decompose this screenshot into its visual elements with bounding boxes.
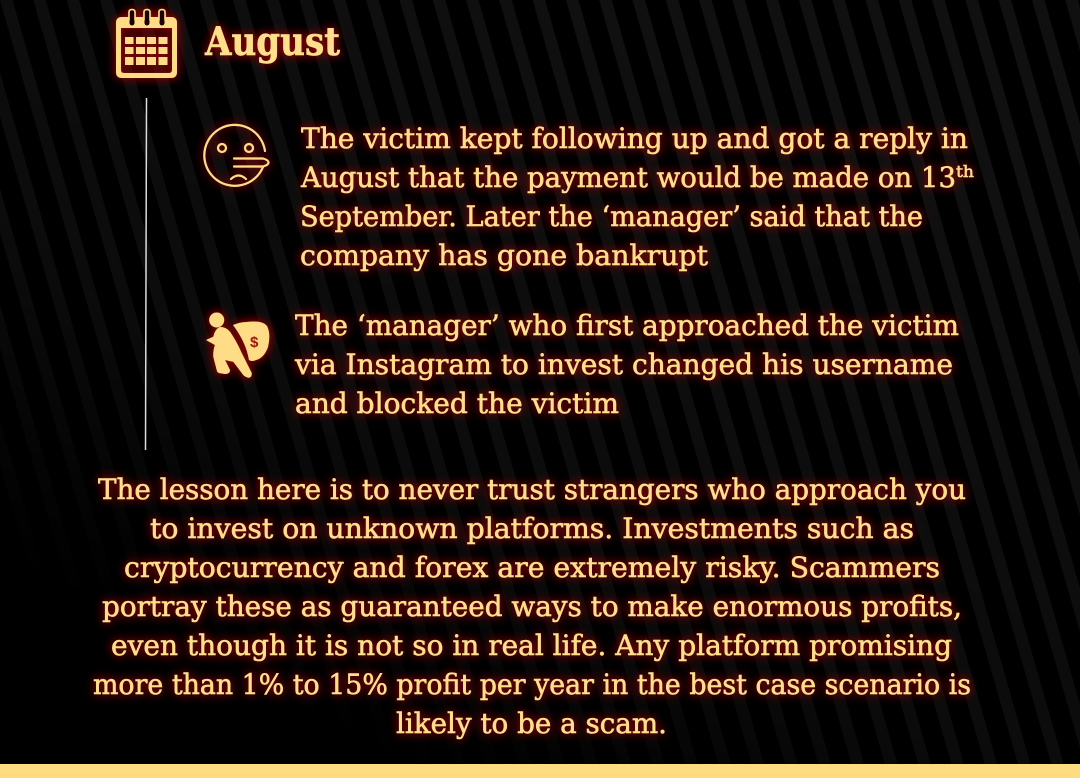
text block: manager blocked victim: [294, 309, 959, 420]
icon: calendar: [116, 10, 177, 78]
text block: lesson: likely to be a scam.: [396, 707, 667, 740]
text block: manager blocked victim: via Instagram to invest changed his username: [294, 348, 953, 381]
text block: August reply: September. Later the ‘manager’ said that the: [300, 200, 923, 233]
heading: August: August: [204, 19, 340, 65]
timeline line: [146, 98, 147, 450]
icon: thief with money bag: [206, 312, 269, 378]
text block: August reply: company has gone bankrupt: [300, 239, 709, 272]
text block: lesson: more than 1% to 15% profit per year in the best case scenario is: [93, 668, 971, 701]
text block: lesson: even though it is not so in real life. Any platform promising: [111, 629, 952, 662]
text block: August reply: The victim kept following up and got a reply in: [301, 122, 968, 155]
icon: thief with money bag: $: [250, 334, 259, 351]
text block: August reply: th: [956, 162, 974, 181]
icon: lying face: [204, 125, 268, 186]
text block: lesson: [93, 473, 971, 740]
text block: lesson: portray these as guaranteed ways to make enormous profits,: [102, 590, 962, 623]
text block: August reply: August that the payment would be made on 13: [300, 161, 956, 194]
text block: lesson: cryptocurrency and forex are extremely risky. Scammers: [124, 551, 940, 584]
text block: manager blocked victim: and blocked the victim: [295, 387, 619, 420]
text block: manager blocked victim: The ‘manager’ who first approached the victim: [295, 309, 959, 342]
text block: lesson: The lesson here is to never trust strangers who approach you: [98, 473, 966, 506]
text block: August reply: [300, 122, 974, 272]
text block: lesson: to invest on unknown platforms. Investments such as: [150, 512, 914, 545]
bottom bar: [0, 764, 1080, 778]
